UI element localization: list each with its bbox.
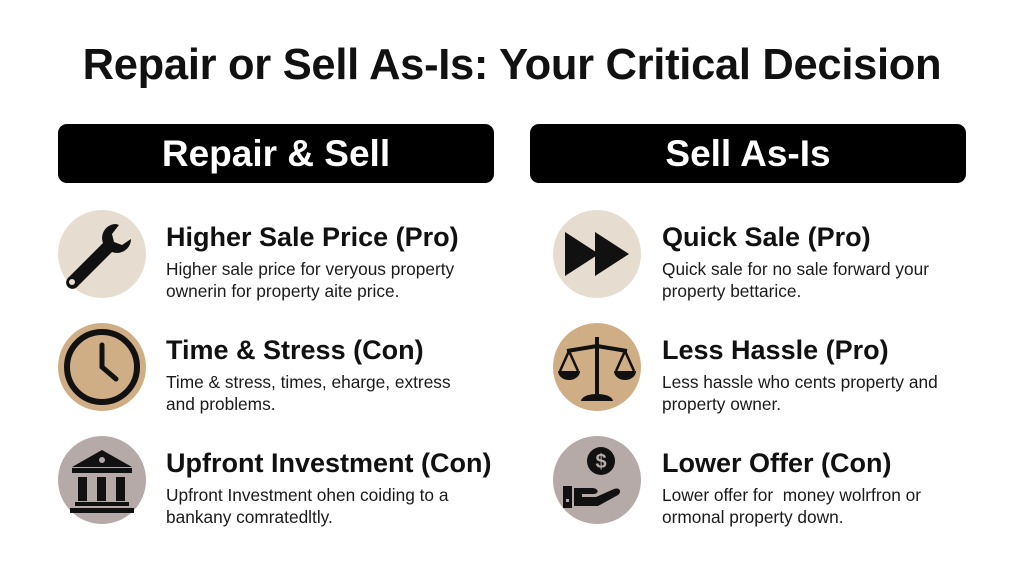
header: Sell As-Is: Sell As-Is <box>665 133 831 174</box>
item: Higher Sale Price: Higher Sale Price (Pro) <box>166 222 459 252</box>
item: Higher Sale Price: Higher sale price for veryous property <box>166 259 454 279</box>
item: Less Hassle: property owner. <box>662 394 781 414</box>
item: Time & Stress: Time & Stress (Con) <box>166 335 424 365</box>
item: Less Hassle: Less hassle who cents property and <box>662 372 938 392</box>
item: Upfront Investment <box>166 448 491 527</box>
header: Sell As-Is <box>530 124 966 183</box>
item: Upfront Investment: bankany comratedltly. <box>166 507 333 527</box>
item: Less Hassle: Less Hassle (Pro) <box>662 335 889 365</box>
item: Upfront Investment: Upfront Investment (Con) <box>166 448 491 478</box>
item: Quick Sale <box>662 222 929 301</box>
icon: bank <box>58 436 146 524</box>
item: Time & Stress: and problems. <box>166 394 276 414</box>
item: Lower Offer: Lower Offer (Con) <box>662 448 892 478</box>
icon: fast forward <box>553 210 641 298</box>
icon: wrench <box>58 210 146 298</box>
item: Quick Sale: Quick sale for no sale forward your <box>662 259 929 279</box>
item: Higher Sale Price <box>166 222 459 301</box>
item: Quick Sale: property bettarice. <box>662 281 801 301</box>
item: Higher Sale Price: ownerin for property aite price. <box>166 281 399 301</box>
header: Repair & Sell <box>58 124 494 183</box>
item: Upfront Investment: Upfront Investment ohen coiding to a <box>166 485 448 505</box>
icon: clock <box>58 323 146 411</box>
item: Lower Offer <box>662 448 921 527</box>
item: Lower Offer: Lower offer for money wolrfron or <box>662 485 921 505</box>
item: Quick Sale: Quick Sale (Pro) <box>662 222 871 252</box>
header: Repair & Sell: Repair & Sell <box>162 133 390 174</box>
item: Less Hassle <box>662 335 938 414</box>
icon: scales <box>553 323 641 411</box>
item: Lower Offer: ormonal property down. <box>662 507 844 527</box>
item: Time & Stress: Time & stress, times, eharge, extress <box>166 372 451 392</box>
title: Repair or Sell As-Is: Your Critical Decision <box>83 41 941 89</box>
icon: hand with coin: $ <box>595 451 607 473</box>
item: Time & Stress <box>166 335 451 414</box>
icon: hand with coin <box>553 436 641 524</box>
